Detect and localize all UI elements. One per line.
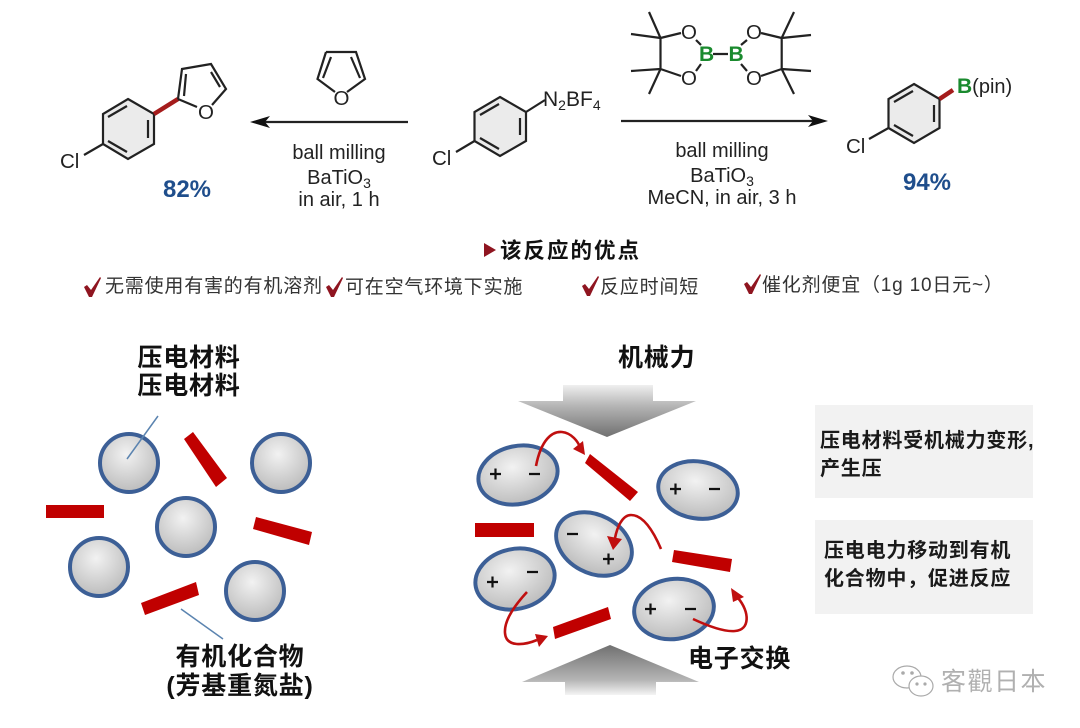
callout: deformation: 压电材料受机械力变形,: [820, 428, 1034, 452]
conditions right: MeCN, in air, 3 h: [648, 187, 796, 209]
conditions right: BaTiO: [690, 165, 754, 189]
starting material: aryl diazonium salt: 4: [593, 97, 601, 113]
product: aryl boronate: [846, 75, 1012, 158]
conditions left: BaTiO: [307, 167, 371, 191]
panel: during milling: [470, 344, 791, 695]
callout: electron transfer: 压电电力移动到有机: [824, 539, 1011, 562]
reagent: B2pin2: B: [728, 43, 744, 66]
watermark: 客觀日本: [941, 668, 1047, 696]
conditions right: ball milling: [675, 140, 769, 162]
yield 82%: 82%: [163, 176, 211, 203]
advantage 3: 反应时间短: [600, 276, 699, 298]
leader lines: [127, 416, 223, 639]
reagent: B2pin2: [631, 12, 811, 94]
reagent: B2pin2: O: [746, 67, 762, 90]
big arrow: down: [518, 385, 696, 437]
reagent: B2pin2: O: [681, 67, 697, 90]
reagent: furan: [318, 52, 365, 110]
panel: before milling: [46, 344, 314, 700]
conditions right: 3: [746, 173, 754, 189]
polarised particles: [470, 438, 742, 644]
big arrow: up: [522, 645, 699, 695]
starting material: aryl diazonium salt: BF: [566, 88, 593, 111]
label: piezoelectric material: 压电材料: [137, 344, 241, 372]
reagent: B2pin2: O: [746, 21, 762, 44]
product: 2-(4-chlorophenyl)furan: [60, 64, 226, 173]
product: 2-(4-chlorophenyl)furan: Cl: [60, 150, 79, 173]
reagent: furan: O: [334, 87, 349, 110]
callout: deformation: [815, 405, 1034, 498]
yield 94%: 94%: [903, 169, 951, 196]
advantage 1: 无需使用有害的有机溶剂: [105, 275, 323, 297]
conditions left: ball milling: [292, 142, 386, 164]
product: 2-(4-chlorophenyl)furan: O: [198, 101, 214, 124]
arrow: to the left: [250, 116, 408, 128]
label: organic compound: (芳基重氮盐): [166, 672, 314, 700]
label: electron exchange: 电子交换: [688, 645, 791, 673]
callout: electron transfer: 化合物中，促进反应: [824, 566, 1011, 590]
heading: advantages: 该反应的优点: [500, 238, 641, 263]
label: organic compound: 有机化合物: [175, 643, 305, 671]
red bars: organic compound: [46, 432, 312, 615]
conditions left: 3: [363, 175, 371, 191]
charges: [487, 468, 720, 614]
product: aryl boronate: Cl: [846, 135, 865, 158]
arrow: to the right: [621, 115, 828, 127]
starting material: aryl diazonium salt: Cl: [432, 147, 451, 170]
advantage 4: 催化剂便宜（1g 10日元~）: [762, 274, 1004, 296]
starting material: aryl diazonium salt: 2: [558, 97, 566, 113]
callout: deformation: 产生压: [820, 457, 882, 480]
callout: electron transfer: [815, 520, 1033, 614]
watermark: [893, 666, 1047, 696]
red bars: [475, 454, 732, 639]
starting material: aryl diazonium salt: [432, 88, 601, 170]
advantage 2: 可在空气环境下实施: [345, 276, 523, 298]
starting material: aryl diazonium salt: N: [543, 88, 558, 111]
electron arrows: [505, 432, 747, 647]
reagent: B2pin2: B: [699, 43, 714, 66]
label: mechanical force: 机械力: [618, 344, 695, 372]
product: aryl boronate: B(pin): [957, 75, 1012, 98]
icon: wechat: [893, 666, 933, 696]
conditions left: in air, 1 h: [298, 189, 380, 211]
label: piezoelectric material: 压电材料: [137, 372, 241, 400]
particles: [70, 434, 310, 620]
reagent: B2pin2: O: [681, 21, 697, 44]
